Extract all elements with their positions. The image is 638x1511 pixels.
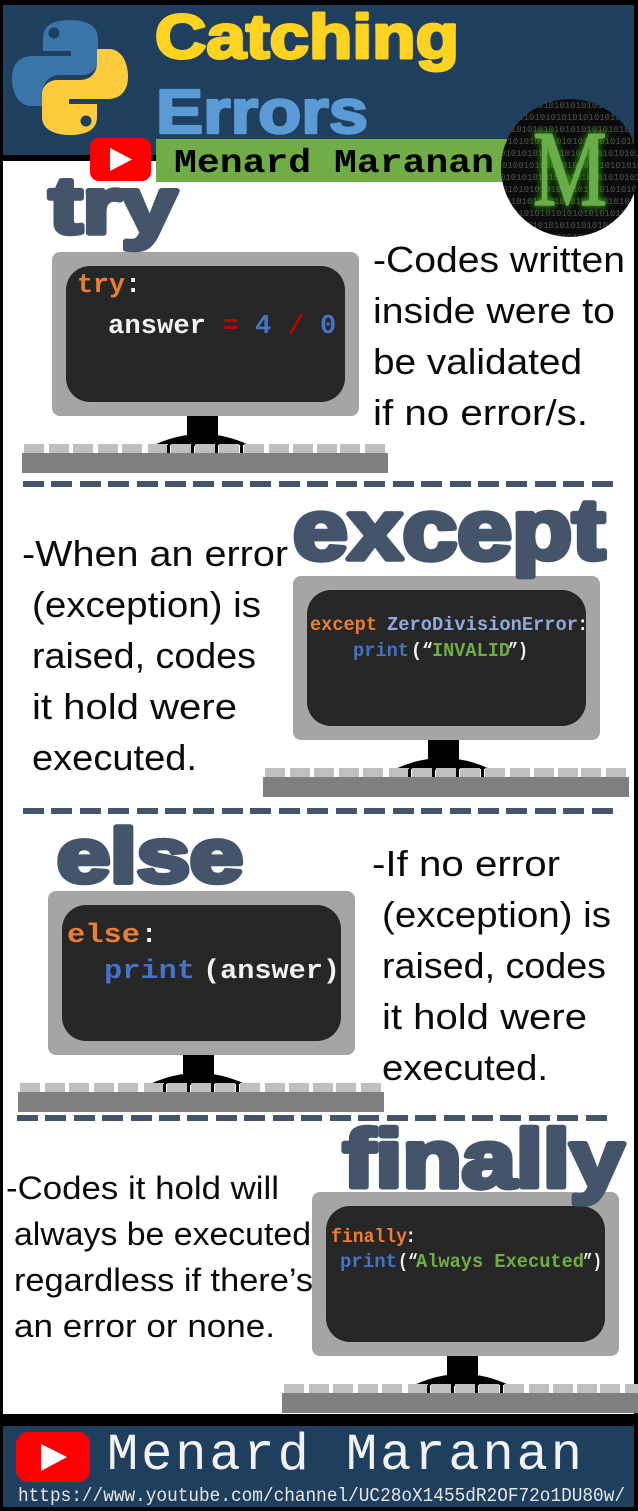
text: try description: -Codes written — [373, 239, 625, 280]
name bar: Menard Maranan — [174, 145, 494, 182]
logo: M badge: M — [533, 110, 607, 229]
monitor: except: print — [353, 640, 409, 662]
monitor: else: print — [104, 957, 195, 987]
monitor: finally: finally — [331, 1226, 408, 1248]
text: else description: -If no error — [372, 843, 560, 884]
logo: M badge: 10101010101010101010101010 — [500, 197, 638, 207]
monitor: finally: : — [405, 1226, 416, 1248]
icon: youtube play button — [16, 1432, 90, 1482]
text: else description: (exception) is — [382, 894, 611, 935]
text: else description: it hold were — [382, 996, 587, 1037]
logo: M badge: 01010101010101010101010101 — [500, 173, 638, 183]
heading: else: else — [57, 814, 243, 899]
logo: M badge: 10101010101010101010101010 — [500, 221, 638, 231]
monitor: except: ”) — [508, 640, 528, 662]
text: try description — [373, 239, 625, 433]
monitor: except: except — [310, 614, 377, 636]
text: finally description: an error or none. — [14, 1308, 275, 1344]
title: Errors: Errors — [156, 78, 368, 147]
text: finally description: -Codes it hold will — [6, 1170, 279, 1206]
monitor: finally: (“ — [398, 1251, 418, 1273]
text: finally description — [6, 1170, 313, 1344]
panel: finally — [6, 1114, 638, 1413]
monitor: try: try — [77, 271, 125, 301]
monitor: finally: print — [340, 1251, 397, 1273]
text: else description — [372, 843, 611, 1088]
monitor: try: = — [223, 312, 239, 342]
text: else description: raised, codes — [382, 945, 606, 986]
text: try description: be validated — [373, 341, 582, 382]
panel: try — [22, 161, 625, 473]
monitor: try: 0 — [320, 312, 336, 342]
heading: try: try — [49, 161, 178, 250]
title: Catching: Catching — [155, 3, 459, 72]
monitor: try: / — [288, 312, 304, 342]
monitor: else: : — [141, 921, 157, 951]
logo: M badge: M — [533, 110, 607, 229]
text: except description: (exception) is — [32, 584, 261, 625]
monitor: finally: Always Executed — [416, 1251, 584, 1273]
name bar — [156, 139, 526, 182]
text: try description: if no error/s. — [373, 392, 588, 433]
text: except description: executed. — [32, 737, 197, 778]
text: except description — [22, 533, 288, 778]
monitor: else: else — [67, 921, 140, 951]
monitor: else — [18, 891, 384, 1112]
text: finally description: regardless if there’s — [14, 1262, 313, 1298]
text: try description: inside were to — [373, 290, 615, 331]
text: except description: it hold were — [32, 686, 237, 727]
text: finally description: always be executed — [14, 1216, 311, 1252]
footer name: Menard Maranan — [107, 1426, 582, 1485]
monitor: try: 4 — [255, 312, 271, 342]
icon: youtube play button — [90, 138, 151, 181]
logo: M badge: 01010101010101010101010101 — [500, 149, 638, 159]
banner — [3, 3, 634, 155]
monitor: finally: ”) — [583, 1251, 602, 1273]
logo: M badge: 10101010101010101010101010 — [500, 125, 638, 135]
icon: python logo — [12, 20, 128, 135]
logo: M badge: 10101010101010101010101010 — [500, 101, 638, 111]
monitor: finally — [282, 1192, 638, 1413]
monitor: except: (“ — [411, 640, 433, 662]
monitor: except: : — [577, 614, 588, 636]
text: else description: executed. — [382, 1047, 548, 1088]
panel: except — [22, 483, 629, 797]
logo: M badge — [500, 99, 638, 243]
heading: except: except — [293, 483, 605, 578]
monitor: else: (answer) — [203, 957, 340, 987]
panel: else — [18, 814, 611, 1112]
footer — [3, 1426, 634, 1507]
monitor: try — [22, 252, 388, 473]
monitor: except: ZeroDivisionError — [387, 614, 578, 636]
monitor: except — [263, 576, 629, 797]
monitor: try: : — [125, 271, 141, 301]
text: except description: raised, codes — [32, 635, 256, 676]
monitor: try: answer — [108, 312, 206, 342]
text: except description: -When an error — [22, 533, 288, 574]
heading: finally: finally — [343, 1114, 624, 1205]
monitor: except: INVALID — [432, 640, 510, 662]
